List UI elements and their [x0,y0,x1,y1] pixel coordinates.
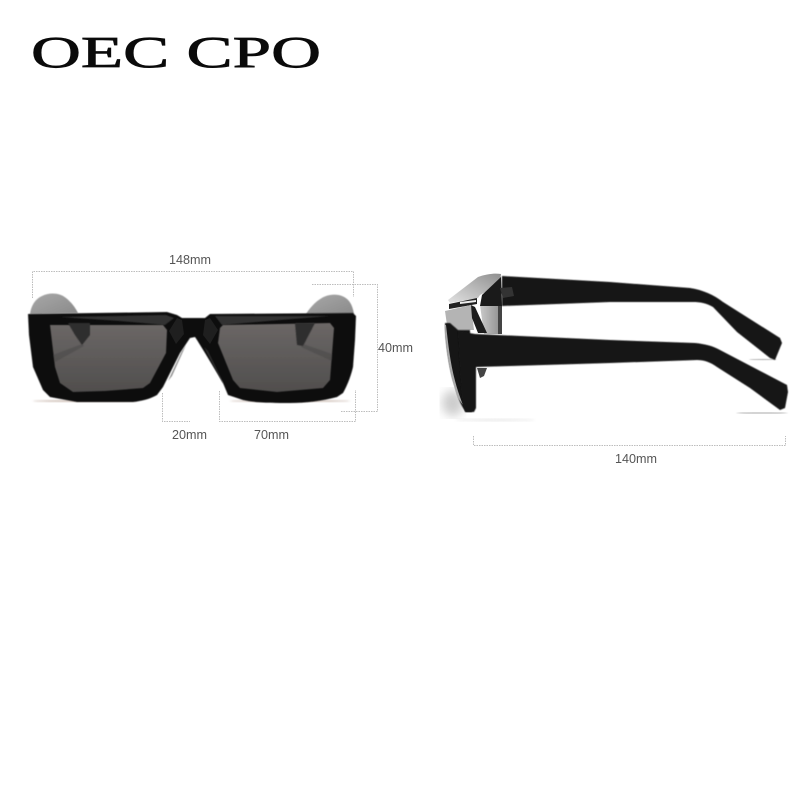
ground shadow [442,390,464,416]
title: brand name: OEC CPO [31,28,321,77]
label: height: 40mm [378,341,413,355]
left temple stub [30,294,78,314]
far lens edge [445,305,474,335]
right temple stub [306,295,354,314]
side view: sunglasses [442,274,788,422]
near front rim [445,323,472,412]
label: bridge: 20mm [172,428,207,442]
lower bevel highlights [168,345,186,381]
hinge detail [500,287,514,298]
inner temple reflections [68,323,90,345]
far lens lower piece [480,305,502,334]
far lens top wedge [448,274,501,303]
far temple [502,276,782,360]
far lens dark strip [449,298,477,309]
front dimension lines [32,272,786,446]
front view: sunglasses [28,294,356,403]
right lens [218,323,334,392]
side dimension line [474,436,786,446]
ground shadow [33,400,137,402]
frame highlight [60,315,330,325]
far lens dark hinge block [480,277,502,306]
label: temple length: 140mm [615,452,657,466]
left lens [50,325,167,392]
near temple and block [458,331,788,412]
bridge facets [169,318,218,344]
frame [28,312,356,403]
label: lens width: 70mm [254,428,289,442]
label: total width: 148mm [169,253,211,267]
nose pad [477,368,487,378]
